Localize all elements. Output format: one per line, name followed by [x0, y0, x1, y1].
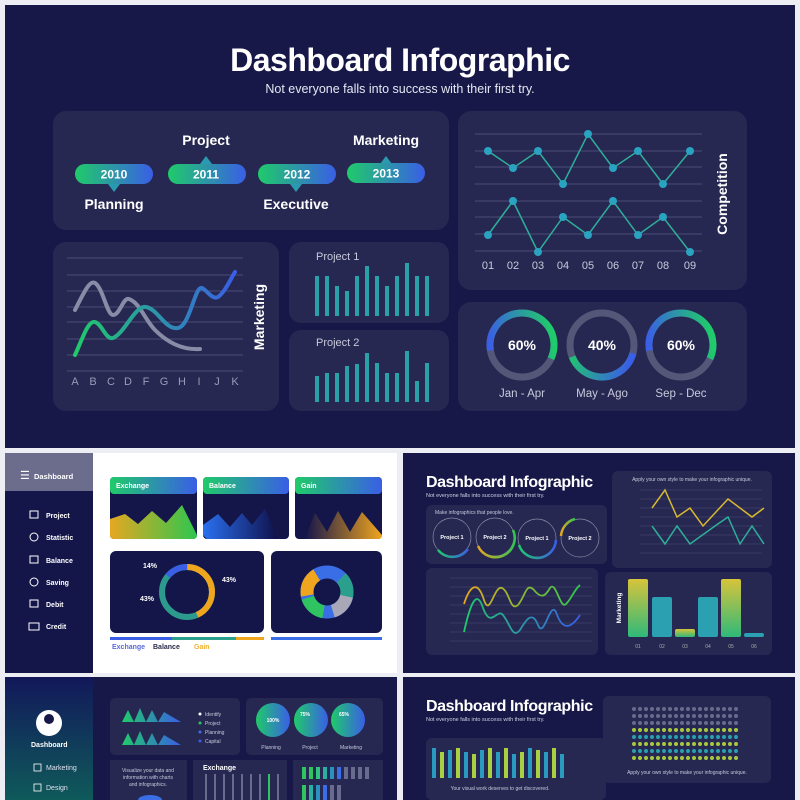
slide: profile dashboard [5, 677, 397, 800]
panel: timeline: Project [182, 132, 230, 148]
panel: mini triangles: Identify [205, 712, 222, 718]
panel: marketing line chart: D [124, 376, 132, 388]
panel: project 2 bars [289, 330, 449, 411]
panel: pie gauges: Marketing [340, 745, 362, 751]
panel: dot matrix [603, 696, 771, 783]
panel: marketing line chart: J [214, 376, 220, 388]
panel: marketing segmented bars: 06 [751, 644, 757, 650]
sidebar: Balance [46, 558, 73, 565]
pill 2012: 2012 [284, 168, 311, 182]
panel: competition line chart: 08 [657, 260, 669, 272]
slide: dark dashboard with charts: Not everyone falls into success with their first try. [426, 493, 545, 499]
pie panel [271, 551, 382, 633]
panel: mini triangles [110, 698, 240, 755]
panel: bars [426, 738, 606, 800]
panel: marketing segmented bars: 02 [659, 644, 665, 650]
panel: dot matrix: Apply your own style to make your infographic unique. [627, 770, 747, 776]
donut panel: 43% [222, 577, 237, 584]
pill 2012 [258, 164, 336, 192]
sidebar: Marketing [46, 765, 77, 772]
ring 60% Sep-Dec [644, 308, 718, 400]
card: exchange [110, 477, 197, 539]
panel: project circles: Project 1 [525, 536, 549, 542]
panel: competition line chart: 07 [632, 260, 644, 272]
panel: marketing line chart [53, 242, 279, 411]
donut panel: 14% [143, 563, 158, 570]
panel: competition line chart: 04 [557, 260, 569, 272]
panel: text [110, 760, 187, 800]
sidebar [5, 677, 93, 800]
panel: marketing line chart: K [231, 376, 239, 388]
donut panel: 43% [140, 596, 155, 603]
panel: marketing line chart: I [197, 376, 201, 388]
panel: competition line chart: 06 [607, 260, 619, 272]
panel: timeline: Marketing [353, 132, 419, 148]
panel: line chart top right: Apply your own style to make your infographic unique. [632, 477, 752, 483]
donut panel [110, 551, 264, 633]
legend bars: Exchange [112, 644, 145, 651]
panel: project circles: Project 2 [483, 535, 507, 541]
legend bars: Gain [194, 644, 210, 651]
panel: competition line chart: 03 [532, 260, 544, 272]
panel: exchange bars [193, 760, 287, 800]
panel: text: information with charts [123, 775, 174, 781]
panel: project circles: Project 1 [440, 535, 464, 541]
panel: pie gauges: 75% [300, 712, 311, 718]
sidebar: ☰ [20, 470, 30, 482]
pill 2013 [347, 156, 425, 183]
panel: progress rings [458, 302, 747, 411]
ring 60% Jan-Apr [485, 308, 559, 400]
card: exchange: Exchange [116, 483, 149, 490]
pill 2010: 2010 [101, 168, 128, 182]
panel: timeline: Executive [263, 196, 329, 212]
sidebar [5, 453, 93, 673]
ring 60% Sep-Dec: Sep - Dec [655, 388, 707, 400]
ring 40% May-Ago: May - Ago [576, 388, 628, 400]
sidebar: Credit [46, 624, 67, 631]
sidebar: Dashboard [34, 472, 74, 481]
panel: project circles: Make infographics that people love. [435, 510, 514, 516]
panel: marketing segmented bars [605, 572, 772, 655]
panel: marketing segmented bars: 04 [705, 644, 711, 650]
panel: competition line chart: Competition [714, 153, 730, 235]
card: gain: Gain [301, 483, 317, 490]
sidebar: Dashboard [31, 742, 68, 749]
panel: wave chart [426, 568, 598, 655]
panel: text: Visualize your data and [122, 768, 174, 774]
panel: project circles [426, 505, 607, 564]
panel: marketing line chart: A [71, 376, 79, 388]
panel: mini triangles: Project [205, 721, 221, 727]
card: gain [295, 477, 382, 539]
panel: exchange bars: Exchange [203, 765, 236, 772]
panel: competition line chart: 09 [684, 260, 696, 272]
ring 60% Sep-Dec: 60% [667, 337, 696, 353]
card: balance: Balance [209, 483, 236, 490]
panel: competition line chart: 05 [582, 260, 594, 272]
panel: project 1 bars [289, 242, 449, 323]
panel: mini triangles: Capital [205, 739, 221, 745]
panel: pie gauges: Project [302, 745, 318, 751]
sidebar: Statistic [46, 535, 73, 542]
panel: marketing segmented bars: Marketing [616, 593, 623, 623]
slide: dark dashboard with charts: Dashboard Infographic [426, 474, 593, 491]
panel: competition line chart: 01 [482, 260, 494, 272]
panel: marketing line chart: B [89, 376, 97, 388]
pill 2010 [75, 164, 153, 192]
panel: mini triangles: Planning [205, 730, 225, 736]
panel: marketing line chart: G [160, 376, 168, 388]
slide: dot matrix dashboard [403, 677, 795, 800]
pill 2011 [168, 156, 246, 184]
panel: pie gauges [246, 698, 383, 755]
panel: marketing line chart: C [107, 376, 115, 388]
panel: marketing line chart: F [143, 376, 150, 388]
panel: line chart top right [612, 471, 772, 568]
panel: pie gauges: Planning [261, 745, 281, 751]
slide: dot matrix dashboard: Not everyone falls into success with their first try. [426, 717, 545, 723]
panel: bars: Your visual work deserves to get discovered. [451, 786, 549, 792]
panel: timeline: Planning [84, 196, 144, 212]
legend bars: Balance [153, 644, 180, 651]
panel: pie gauges: 100% [267, 718, 280, 724]
panel: marketing line chart: Marketing [251, 284, 267, 350]
pill 2011: 2011 [193, 168, 219, 182]
panel: green bars [293, 760, 383, 800]
sidebar: Debit [46, 602, 64, 609]
ring 60% Jan-Apr: 60% [508, 337, 537, 353]
sidebar: Project [46, 513, 70, 520]
panel: competition line chart [458, 111, 747, 290]
sidebar: Saving [46, 580, 69, 587]
panel: marketing segmented bars: 05 [728, 644, 734, 650]
panel: marketing line chart: H [178, 376, 186, 388]
subtitle: Not everyone falls into success with their first try. [265, 82, 535, 96]
panel: pie gauges: 65% [339, 712, 350, 718]
slide: dot matrix dashboard: Dashboard Infographic [426, 698, 593, 715]
sidebar: Design [46, 785, 68, 792]
slide: main dashboard [5, 5, 795, 448]
pill 2013: 2013 [373, 166, 400, 180]
ring 40% May-Ago [563, 306, 641, 400]
panel: project circles: Project 2 [568, 536, 592, 542]
panel: text: and infographics. [129, 782, 167, 788]
slide: dark dashboard with charts [403, 453, 795, 673]
panel: competition line chart: 02 [507, 260, 519, 272]
ring 40% May-Ago: 40% [588, 337, 617, 353]
panel: marketing segmented bars: 03 [682, 644, 688, 650]
legend bars [110, 637, 382, 651]
ring 60% Jan-Apr: Jan - Apr [499, 388, 545, 400]
panel: project 2 bars: Project 2 [316, 337, 359, 349]
title: Dashboard Infographic [230, 42, 570, 78]
panel: timeline [53, 111, 449, 230]
card: balance [203, 477, 289, 539]
slide: white dashboard with sidebar [5, 453, 397, 673]
panel: project 1 bars: Project 1 [316, 251, 359, 263]
panel: marketing segmented bars: 01 [635, 644, 641, 650]
